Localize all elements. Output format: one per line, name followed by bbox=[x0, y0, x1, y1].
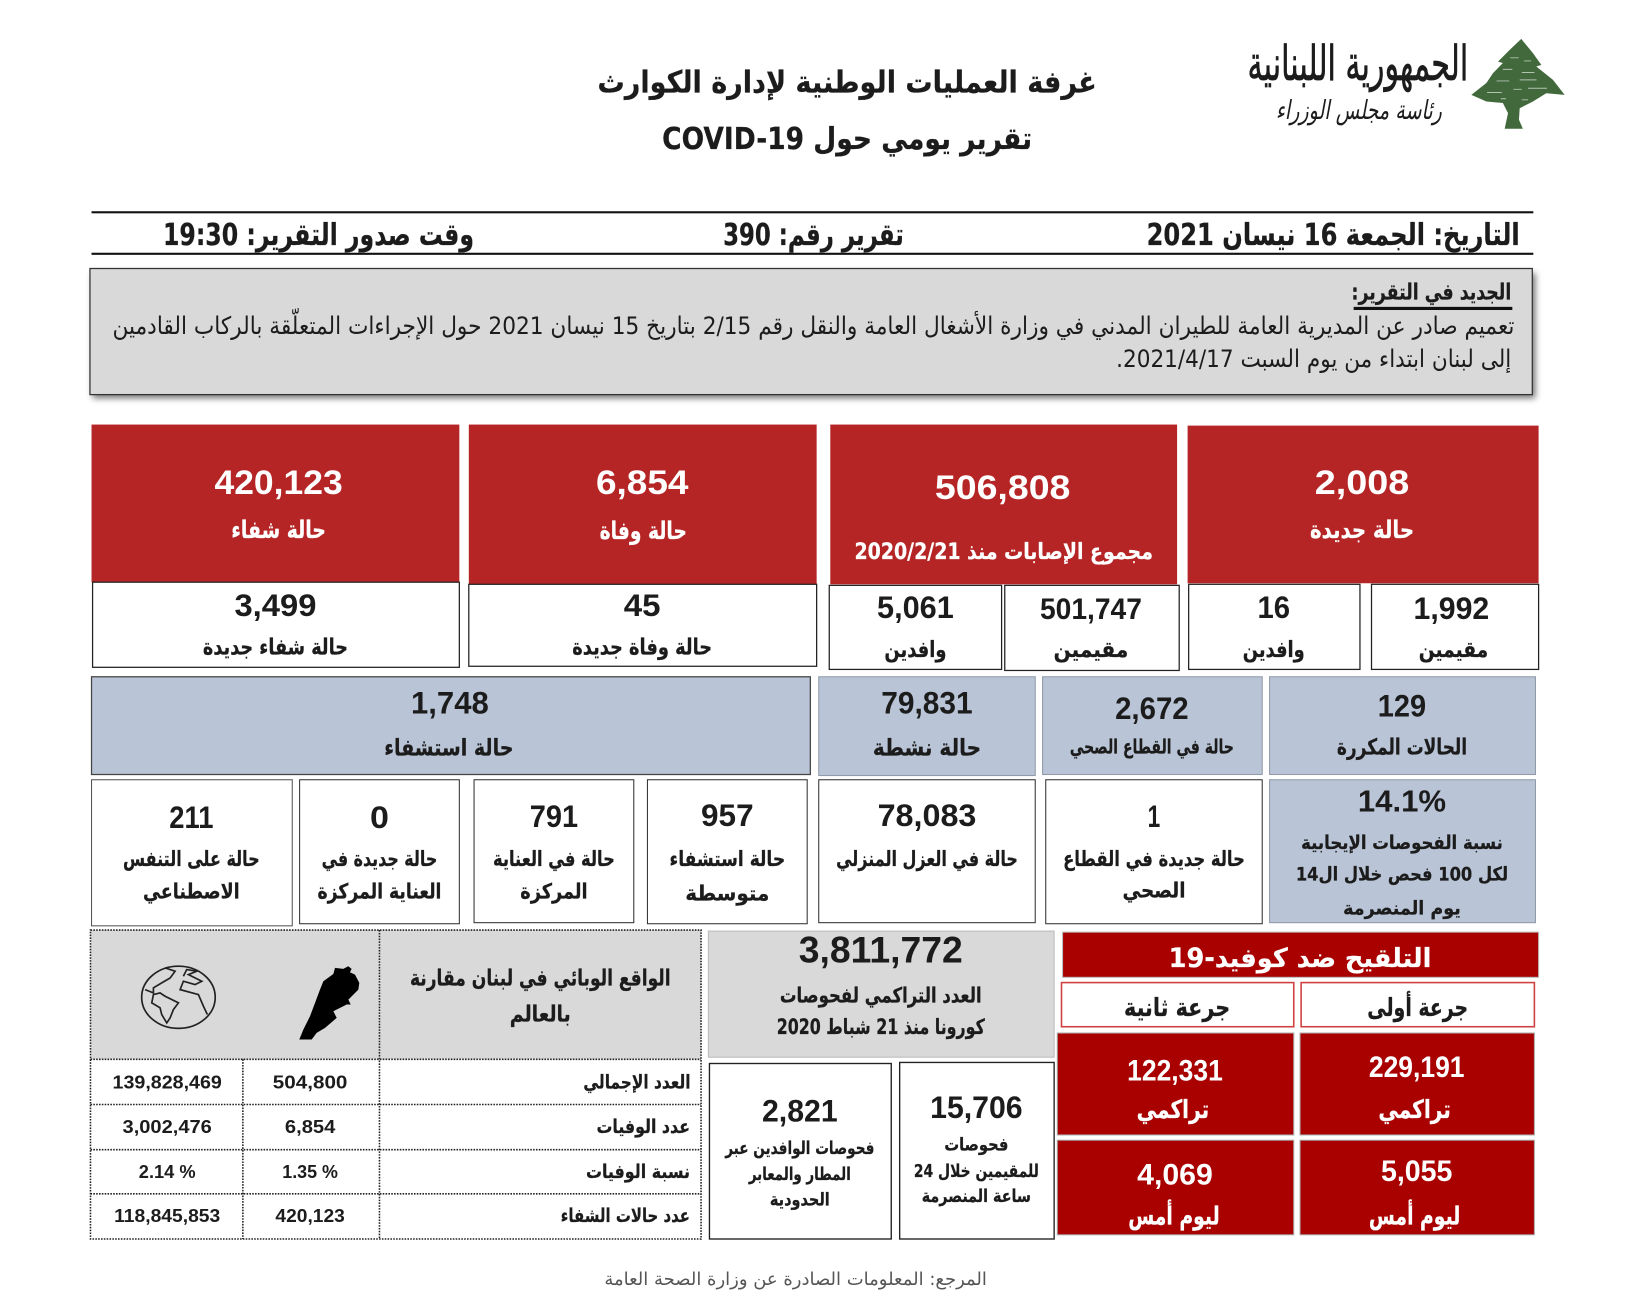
panel: total infections: 501,747 bbox=[1040, 593, 1142, 626]
panel: positivity rate bbox=[1270, 780, 1535, 923]
panel: total infections: 506,808 bbox=[935, 469, 1070, 507]
panel: second dose yesterday bbox=[1057, 1140, 1294, 1235]
panel: moderate hospitalisation: متوسطة bbox=[685, 881, 769, 906]
table rows bbox=[113, 1072, 691, 1227]
report meta row: التاريخ: الجمعة 16 نيسان 2021 bbox=[1147, 218, 1520, 253]
footer source: المرجع: المعلومات الصادرة عن وزارة الصحة العامة bbox=[604, 1269, 987, 1290]
panel: arrivals tests bbox=[709, 1063, 891, 1239]
panel: deaths: حالة وفاة bbox=[600, 517, 687, 545]
panel: new cases: وافدين bbox=[1243, 638, 1305, 663]
panel: ICU bbox=[474, 780, 634, 923]
panel: moderate hospitalisation: حالة استشفاء bbox=[670, 846, 785, 871]
panel: repeated cases: الحالات المكررة bbox=[1337, 736, 1467, 761]
panel: health sector cases: 2,672 bbox=[1115, 690, 1189, 726]
icon: Lebanon map bbox=[299, 966, 359, 1040]
panel: arrivals tests: الحدودية bbox=[770, 1189, 830, 1210]
logo: Republic of Lebanon calligraphy: رئاسة مجلس الوزراء bbox=[1276, 96, 1442, 126]
panel: ventilator: حالة على التنفس bbox=[123, 846, 260, 871]
panel: ventilator: الاصطناعي bbox=[143, 879, 240, 904]
panel: deaths: 6,854 bbox=[596, 464, 689, 502]
panel: new ICU: حالة جديدة في bbox=[322, 846, 437, 871]
table rows: 504,800 bbox=[273, 1073, 347, 1094]
panel: recovered: حالة شفاء bbox=[231, 516, 326, 544]
panel: first dose label: جرعة أولى bbox=[1367, 991, 1468, 1023]
panel: positivity rate: يوم المنصرمة bbox=[1343, 897, 1461, 919]
panel: vaccination header bbox=[1063, 932, 1539, 977]
panel: hospitalised: 1,748 bbox=[411, 685, 489, 721]
table rows: 139,828,469 bbox=[113, 1073, 222, 1094]
panel: new cases: 1,992 bbox=[1414, 590, 1489, 626]
panel: second dose label bbox=[1062, 983, 1294, 1027]
panel: arrivals tests: المطار والمعابر bbox=[748, 1164, 851, 1185]
panel: new cases: 16 bbox=[1257, 589, 1290, 625]
panel: residents tests: فحوصات bbox=[944, 1135, 1008, 1156]
report meta row: تقرير رقم: 390 bbox=[723, 218, 904, 253]
panel: first dose cumulative bbox=[1300, 1033, 1534, 1135]
panel: repeated cases bbox=[1270, 677, 1535, 775]
panel: health sector cases bbox=[1043, 677, 1262, 775]
panel: recovered: حالة شفاء جديدة bbox=[203, 636, 348, 661]
icon: globe bbox=[142, 966, 215, 1028]
panel: new ICU bbox=[300, 780, 459, 924]
panel: new cases bbox=[1188, 426, 1539, 669]
panel: first dose cumulative: تراكمي bbox=[1378, 1095, 1451, 1125]
table rows: عدد الوفيات bbox=[596, 1116, 690, 1138]
panel: second dose yesterday: 4,069 bbox=[1137, 1158, 1213, 1191]
panel: cumulative tests: كورونا منذ 21 شباط 2020 bbox=[777, 1014, 985, 1039]
panel: new ICU: العناية المركزة bbox=[317, 879, 441, 904]
panel: residents tests: للمقيمين خلال 24 bbox=[914, 1161, 1039, 1182]
panel: positivity rate: لكل 100 فحص خلال ال14 bbox=[1296, 864, 1508, 886]
panel: home isolation: حالة في العزل المنزلي bbox=[836, 846, 1018, 871]
panel: ventilator: 211 bbox=[169, 799, 213, 835]
table: Lebanon vs world bbox=[90, 930, 701, 1239]
panel: second dose label: جرعة ثانية bbox=[1124, 993, 1230, 1023]
panel: ICU: 791 bbox=[530, 798, 578, 834]
panel: deaths: حالة وفاة جديدة bbox=[572, 636, 712, 661]
panel: second dose yesterday: ليوم أمس bbox=[1128, 1199, 1220, 1231]
panel: active cases bbox=[819, 677, 1035, 776]
panel: arrivals tests: 2,821 bbox=[762, 1092, 838, 1128]
logo: Republic of Lebanon calligraphy: الجمهورية اللبنانية bbox=[1248, 36, 1468, 92]
table rows: العدد الإجمالي bbox=[583, 1072, 691, 1094]
panel: residents tests: 15,706 bbox=[930, 1089, 1023, 1125]
panel: active cases: 79,831 bbox=[881, 685, 973, 721]
panel: total infections: 5,061 bbox=[877, 589, 954, 625]
report meta row: وقت صدور التقرير: 19:30 bbox=[163, 218, 474, 253]
title bbox=[598, 65, 1097, 157]
panel: residents tests: ساعة المنصرمة bbox=[922, 1186, 1031, 1207]
table rows: نسبة الوفيات bbox=[586, 1161, 690, 1183]
table rows: عدد حالات الشفاء bbox=[561, 1205, 690, 1227]
panel: new health sector case: 1 bbox=[1148, 798, 1160, 834]
panel: recovered: 3,499 bbox=[234, 587, 316, 623]
panel: new cases: 2,008 bbox=[1315, 464, 1409, 502]
panel: home isolation bbox=[819, 780, 1035, 923]
panel: new health sector case: حالة جديدة في القطاع bbox=[1063, 846, 1245, 871]
panel: new cases: حالة جديدة bbox=[1310, 516, 1414, 544]
table rows: 118,845,853 bbox=[114, 1206, 220, 1227]
panel: ventilator bbox=[92, 780, 292, 926]
table rows: 2.14 % bbox=[139, 1162, 196, 1183]
panel: news in the report: الجديد في التقرير: bbox=[1352, 281, 1511, 306]
panel: first dose label bbox=[1301, 983, 1534, 1027]
panel: health sector cases: حالة في القطاع الصحي bbox=[1070, 734, 1234, 759]
panel: second dose cumulative: تراكمي bbox=[1137, 1095, 1209, 1125]
panel: second dose cumulative bbox=[1057, 1033, 1294, 1135]
panel: hospitalised: حالة استشفاء bbox=[384, 736, 513, 762]
panel: total infections: وافدين bbox=[884, 638, 946, 663]
panel: arrivals tests: فحوصات الوافدين عبر bbox=[724, 1138, 874, 1159]
panel: first dose yesterday: ليوم أمس bbox=[1369, 1199, 1460, 1231]
panel: recovered bbox=[92, 425, 459, 667]
table rows: 3,002,476 bbox=[123, 1117, 212, 1138]
panel: hospitalised bbox=[92, 677, 810, 775]
panel: ICU: المركزة bbox=[520, 879, 588, 904]
table header background bbox=[90, 930, 701, 1059]
panel: vaccination header: التلقيح ضد كوفيد-19 bbox=[1169, 944, 1431, 974]
panel: first dose cumulative: 229,191 bbox=[1369, 1051, 1465, 1084]
table: Lebanon vs world: الواقع الوبائي في لبنان مقارنة bbox=[410, 967, 671, 992]
panel: second dose cumulative: 122,331 bbox=[1127, 1054, 1223, 1087]
panel: positivity rate: 14.1% bbox=[1358, 784, 1446, 818]
panel: home isolation: 78,083 bbox=[878, 797, 976, 833]
panel: new cases: مقيمين bbox=[1419, 638, 1488, 663]
panel: new health sector case bbox=[1046, 780, 1262, 924]
table: Lebanon vs world: بالعالم bbox=[510, 1002, 571, 1027]
panel: recovered: 420,123 bbox=[214, 464, 343, 502]
panel: news in the report: تعميم صادر عن المديرية العامة للطيران المدني في وزارة الأشغال العامة والنقل رقم 2/15 بتاريخ 15 نيسان 2021 حول الإجراءات المتعلّقة بالركاب القادمين bbox=[113, 308, 1514, 340]
table rows: 1.35 % bbox=[282, 1162, 338, 1183]
panel: news in the report: إلى لبنان ابتداء من يوم السبت 2021/4/17. bbox=[1116, 345, 1511, 374]
panel: first dose yesterday: 5,055 bbox=[1381, 1155, 1452, 1188]
title: غرفة العمليات الوطنية لإدارة الكوارث bbox=[598, 65, 1097, 100]
panel: news in the report bbox=[90, 269, 1535, 398]
panel: total infections bbox=[829, 425, 1179, 670]
panel: repeated cases: 129 bbox=[1378, 688, 1426, 724]
panel: first dose yesterday bbox=[1300, 1140, 1534, 1235]
panel: cumulative tests bbox=[708, 930, 1054, 1057]
panel: residents tests bbox=[900, 1062, 1054, 1239]
panel: new health sector case: الصحي bbox=[1122, 877, 1186, 902]
title: تقرير يومي حول COVID-19 bbox=[662, 122, 1032, 157]
panel: total infections: مقيمين bbox=[1054, 638, 1128, 663]
table rows: 420,123 bbox=[275, 1206, 345, 1227]
panel: cumulative tests: 3,811,772 bbox=[799, 930, 963, 971]
logo: Lebanese cedar bbox=[1471, 39, 1565, 129]
panel: moderate hospitalisation bbox=[647, 780, 807, 924]
panel: ICU: حالة في العناية bbox=[493, 846, 615, 871]
panel: deaths bbox=[469, 425, 817, 666]
logo: Republic of Lebanon calligraphy bbox=[1248, 36, 1468, 126]
panel: total infections: مجموع الإصابات منذ 2020/2/21 bbox=[854, 540, 1153, 565]
table rows: 6,854 bbox=[285, 1117, 336, 1138]
panel: new ICU: 0 bbox=[370, 799, 389, 835]
panel: cumulative tests: العدد التراكمي لفحوصات bbox=[780, 983, 982, 1008]
panel: positivity rate: نسبة الفحوصات الإيجابية bbox=[1301, 832, 1503, 854]
report meta row bbox=[92, 211, 1533, 255]
panel: moderate hospitalisation: 957 bbox=[701, 797, 754, 833]
panel: deaths: 45 bbox=[624, 587, 661, 623]
panel: active cases: حالة نشطة bbox=[873, 736, 981, 762]
